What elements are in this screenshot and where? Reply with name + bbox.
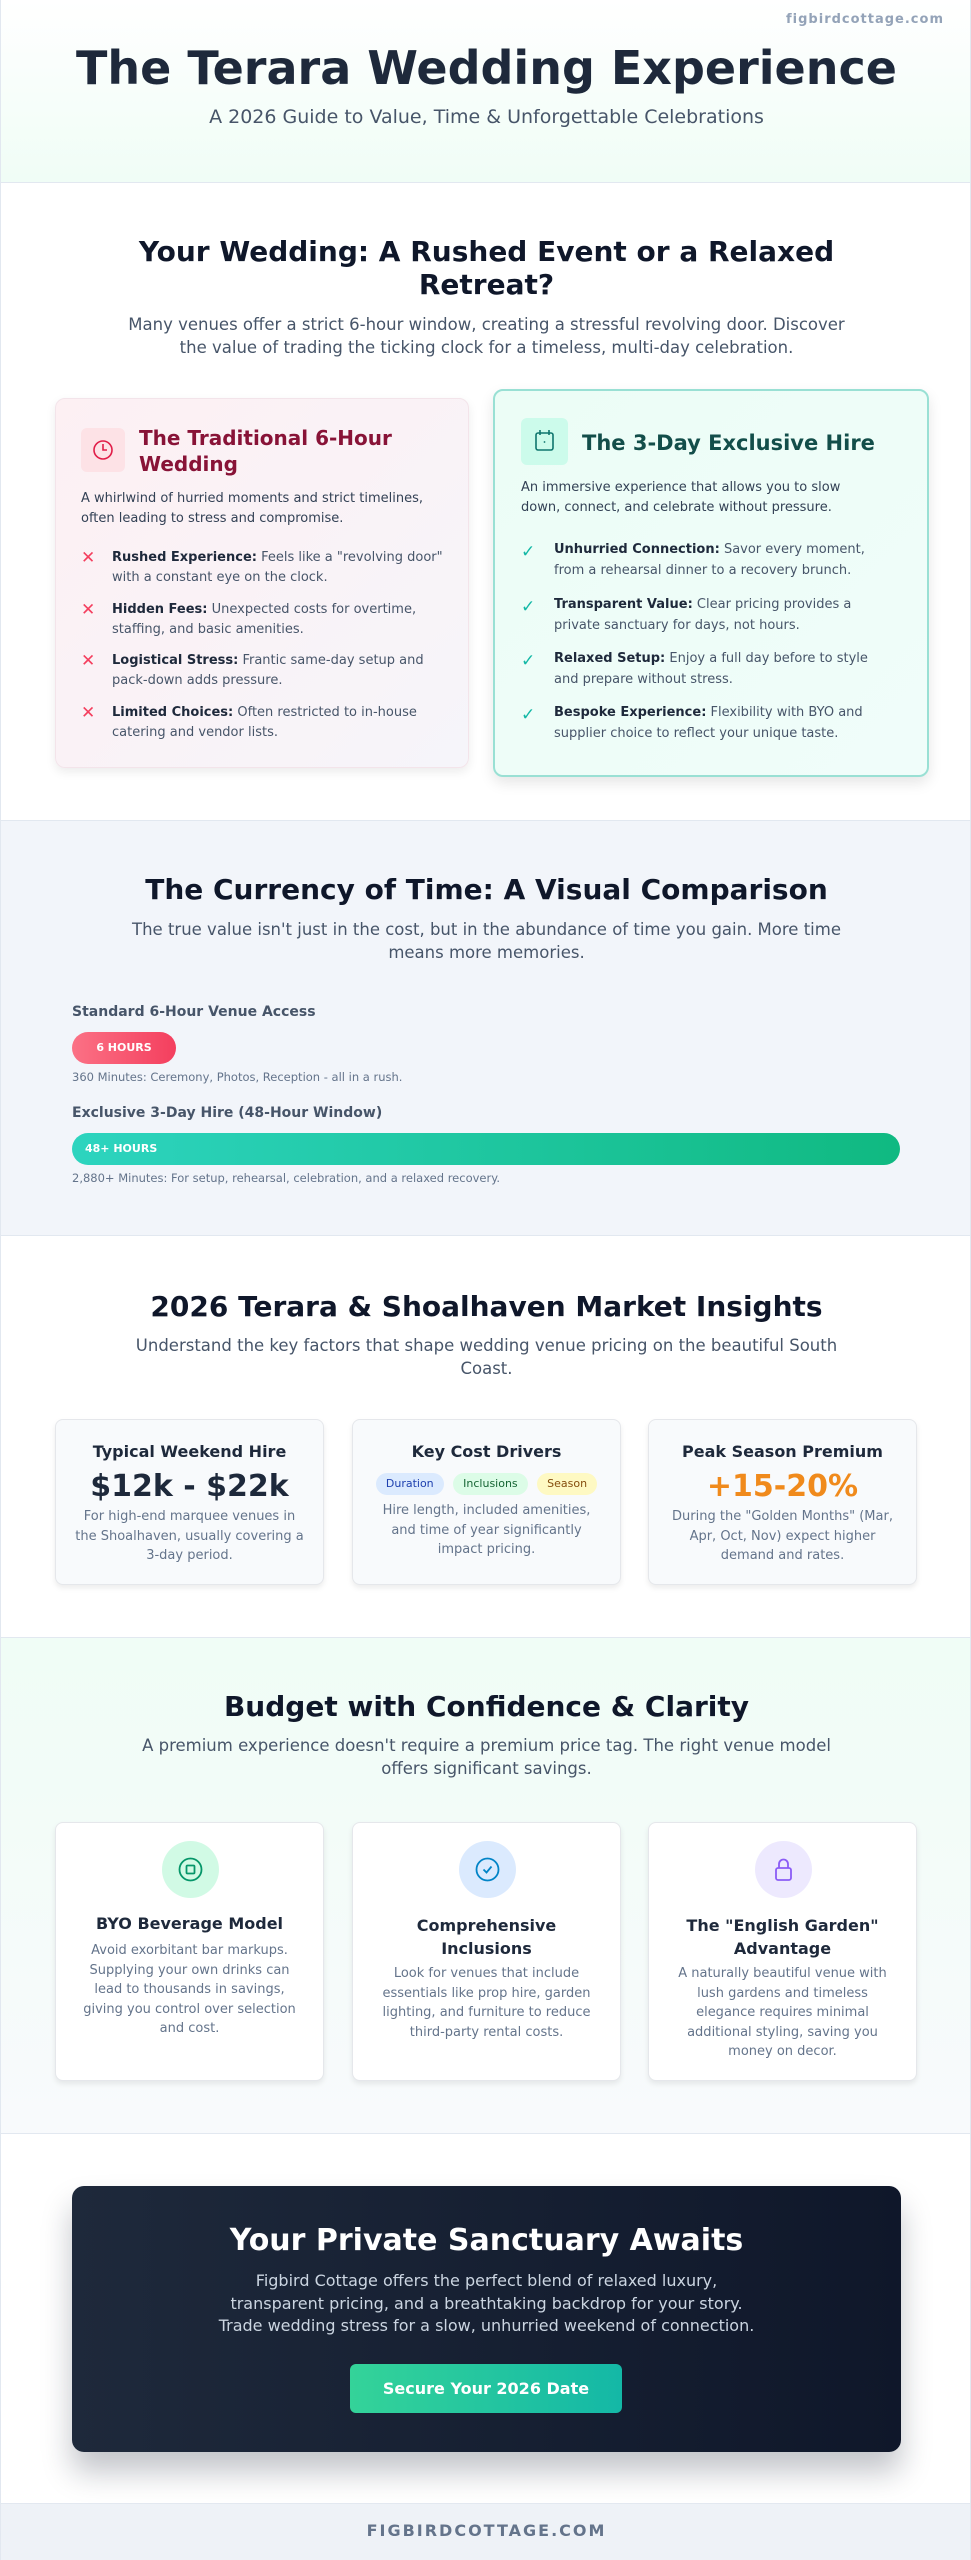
- card: weekend hire: [55, 1419, 324, 1585]
- card: cost drivers: Hire length, included amenities,: [383, 1503, 590, 1518]
- card: weekend hire: For high-end marquee venues in: [84, 1509, 295, 1524]
- footer: [1, 2503, 971, 2560]
- card: weekend hire: Typical Weekend Hire: [93, 1442, 286, 1461]
- panel description: [81, 491, 423, 526]
- button: [350, 2364, 622, 2413]
- card: BYO: lead to thousands in savings,: [94, 1982, 285, 1997]
- card: peak season: +15-20%: [707, 1469, 858, 1504]
- intro text: Many venues offer a strict 6-hour window, creating a stressful revolving door. Discover: [128, 315, 845, 334]
- item: bespoke: Bespoke Experience: Flexibility with BYO and: [554, 705, 863, 720]
- bar chart: 48 hours: Exclusive 3-Day Hire (48-Hour Window): [72, 1105, 382, 1121]
- bar chart: 6 hours: 6 HOURS: [96, 1041, 152, 1054]
- item: hidden fees: [81, 600, 416, 637]
- card: inclusions: Comprehensive: [417, 1916, 556, 1935]
- item: transparent: Transparent Value: Clear pricing provides a: [554, 597, 851, 612]
- panel description: [521, 480, 840, 515]
- panel description: often leading to stress and compromise.: [81, 511, 343, 526]
- card: BYO: Avoid exorbitant bar markups.: [91, 1943, 288, 1958]
- bar chart: 6 hours: 360 Minutes: Ceremony, Photos, Reception - all in a rush.: [72, 1070, 402, 1084]
- cta text: transparent pricing, and a breathtaking backdrop for your story.: [230, 2294, 743, 2312]
- item: rushed: with a constant eye on the clock.: [112, 570, 328, 585]
- item: hidden fees: Hidden Fees: Unexpected costs for overtime,: [112, 602, 416, 617]
- item: limited choices: ✕: [81, 703, 95, 723]
- item: hidden fees: staffing, and basic amenities.: [112, 622, 304, 637]
- panel description: down, connect, and celebrate without pressure.: [521, 500, 832, 515]
- card: cost drivers: Key Cost Drivers: [412, 1442, 561, 1461]
- list: [521, 542, 868, 741]
- heading: Retreat?: [419, 268, 554, 301]
- site url: figbirdcottage.com: [786, 12, 944, 27]
- item: limited choices: Limited Choices: Often restricted to in-house: [112, 705, 417, 720]
- panel title: Wedding: [139, 452, 238, 476]
- button: Secure Your 2026 Date: [383, 2379, 589, 2398]
- pills: Duration: [386, 1477, 434, 1490]
- item: unhurried: [521, 542, 865, 578]
- item: relaxed setup: ✓: [521, 651, 535, 671]
- item: logistical stress: ✕: [81, 651, 95, 671]
- card: weekend hire: 3-day period.: [146, 1548, 233, 1563]
- title: The Terara Wedding Experience: [76, 41, 897, 95]
- icon: check: [459, 1841, 516, 1898]
- card: BYO: giving you control over selection: [83, 2002, 296, 2016]
- card: inclusions: essentials like prop hire, garden: [382, 1986, 591, 2000]
- intro text: A premium experience doesn't require a premium price tag. The right venue model: [142, 1736, 831, 1755]
- item: logistical stress: Logistical Stress: Frantic same-day setup and: [112, 653, 424, 668]
- card: peak season: Apr, Oct, Nov) expect higher: [690, 1528, 875, 1544]
- bar chart: 48 hours: [72, 1105, 900, 1185]
- card: english garden: Advantage: [734, 1939, 831, 1958]
- item: transparent: private sanctuary for days, not hours.: [554, 618, 800, 633]
- card: BYO: and cost.: [160, 2021, 219, 2036]
- item: logistical stress: [81, 651, 424, 688]
- icon: calendar: [521, 418, 568, 465]
- item: rushed: Rushed Experience: Feels like a "revolving door": [112, 550, 443, 565]
- card: peak season: demand and rates.: [721, 1548, 844, 1563]
- panel: traditional 6-hour: [55, 398, 469, 768]
- bar chart: 48 hours: 2,880+ Minutes: For setup, rehearsal, celebration, and a relaxed recovery.: [72, 1171, 500, 1185]
- heading: Budget with Confidence & Clarity: [224, 1690, 749, 1723]
- item: unhurried: Unhurried Connection: Savor every moment,: [554, 542, 865, 557]
- card: english garden: lush gardens and timeless: [697, 1986, 868, 2000]
- panel title: [139, 426, 392, 476]
- icon: beverage: [162, 1841, 219, 1898]
- panel description: A whirlwind of hurried moments and strict timelines,: [81, 491, 423, 506]
- item: relaxed setup: Relaxed Setup: Enjoy a full day before to style: [554, 651, 868, 666]
- card: peak season: Peak Season Premium: [682, 1442, 883, 1461]
- card: peak season: During the "Golden Months" (Mar,: [672, 1509, 893, 1524]
- card: weekend hire: $12k - $22k: [90, 1469, 289, 1504]
- bar chart: 6 hours: [72, 1004, 402, 1084]
- heading: The Currency of Time: A Visual Comparison: [145, 873, 828, 906]
- item: bespoke: [521, 705, 863, 741]
- intro text: [132, 920, 841, 962]
- item: relaxed setup: and prepare without stress.: [554, 672, 733, 687]
- item: transparent: [521, 597, 851, 633]
- intro text: [136, 1336, 837, 1378]
- intro text: offers significant savings.: [381, 1759, 592, 1778]
- cta title: Your Private Sanctuary Awaits: [230, 2223, 743, 2258]
- item: logistical stress: pack-down adds pressure.: [112, 673, 282, 688]
- card: english garden: [648, 1822, 917, 2081]
- item: bespoke: ✓: [521, 705, 535, 725]
- card: english garden: money on decor.: [728, 2044, 837, 2059]
- card: BYO: [55, 1822, 324, 2081]
- card: cost drivers: and time of year significantly: [391, 1522, 582, 1538]
- heading: [138, 235, 834, 301]
- pills: [376, 1473, 597, 1495]
- card: inclusions: [352, 1822, 621, 2081]
- icon: lock: [755, 1841, 812, 1898]
- cta text: Figbird Cottage offers the perfect blend of relaxed luxury,: [256, 2271, 717, 2290]
- panel: 3-day exclusive hire: [493, 389, 929, 777]
- heading: Your Wedding: A Rushed Event or a Relaxed: [139, 235, 834, 268]
- icon: clock: [81, 428, 125, 472]
- card: BYO: BYO Beverage Model: [96, 1914, 283, 1933]
- card: inclusions: third-party rental costs.: [410, 2024, 563, 2040]
- intro text: The true value isn't just in the cost, but in the abundance of time you gain. More time: [132, 920, 841, 939]
- card: peak season: [648, 1419, 917, 1585]
- card: BYO: Supplying your own drinks can: [89, 1962, 290, 1978]
- item: transparent: ✓: [521, 597, 535, 617]
- item: unhurried: from a rehearsal dinner to a recovery brunch.: [554, 563, 851, 578]
- card: english garden: A naturally beautiful venue with: [678, 1966, 887, 1981]
- pills: Season: [547, 1477, 587, 1490]
- intro text: the value of trading the ticking clock for a timeless, multi-day celebration.: [180, 338, 793, 357]
- bar chart: 6 hours: Standard 6-Hour Venue Access: [72, 1004, 316, 1020]
- item: bespoke: supplier choice to reflect your unique taste.: [554, 726, 838, 741]
- panel description: An immersive experience that allows you to slow: [521, 480, 840, 495]
- card: cost drivers: impact pricing.: [438, 1542, 535, 1557]
- section: budget: [1, 1638, 971, 2134]
- intro text: [128, 315, 845, 357]
- heading: 2026 Terara & Shoalhaven Market Insights: [150, 1290, 823, 1323]
- cta text: [218, 2271, 754, 2335]
- card: cost drivers: [352, 1419, 621, 1585]
- pills: Inclusions: [463, 1477, 518, 1490]
- card: inclusions: Look for venues that include: [394, 1966, 579, 1981]
- card: english garden: The "English Garden": [686, 1916, 879, 1935]
- cta text: Trade wedding stress for a slow, unhurried weekend of connection.: [219, 2316, 754, 2335]
- intro text: Understand the key factors that shape wedding venue pricing on the beautiful South: [136, 1336, 837, 1355]
- card: english garden: additional styling, saving you: [687, 2024, 878, 2040]
- card: english garden: elegance requires minimal: [696, 2005, 869, 2020]
- bar chart: 48 hours: 48+ HOURS: [85, 1142, 157, 1155]
- section: currency of time: [1, 821, 971, 1236]
- subtitle: A 2026 Guide to Value, Time & Unforgettable Celebrations: [209, 106, 764, 128]
- panel title: The Traditional 6-Hour: [139, 426, 392, 450]
- header: [1, 0, 971, 183]
- list: [81, 548, 443, 740]
- card: weekend hire: the Shoalhaven, usually covering a: [75, 1528, 304, 1544]
- item: rushed: [81, 548, 443, 585]
- intro text: means more memories.: [388, 943, 585, 962]
- item: unhurried: ✓: [521, 542, 535, 562]
- section: market insights: [1, 1236, 971, 1638]
- item: limited choices: catering and vendor lists.: [112, 725, 278, 740]
- intro text: Coast.: [460, 1359, 513, 1378]
- cta panel: [72, 2186, 901, 2452]
- panel title: The 3-Day Exclusive Hire: [582, 431, 875, 455]
- footer: FIGBIRDCOTTAGE.COM: [367, 2521, 606, 2540]
- item: limited choices: [81, 703, 417, 740]
- item: relaxed setup: [521, 651, 868, 687]
- item: rushed: ✕: [81, 548, 95, 568]
- item: hidden fees: ✕: [81, 600, 95, 620]
- section: comparison: [1, 183, 971, 821]
- intro text: [142, 1736, 831, 1778]
- card: inclusions: lighting, and furniture to reduce: [383, 2005, 590, 2020]
- card: inclusions: Inclusions: [441, 1939, 532, 1958]
